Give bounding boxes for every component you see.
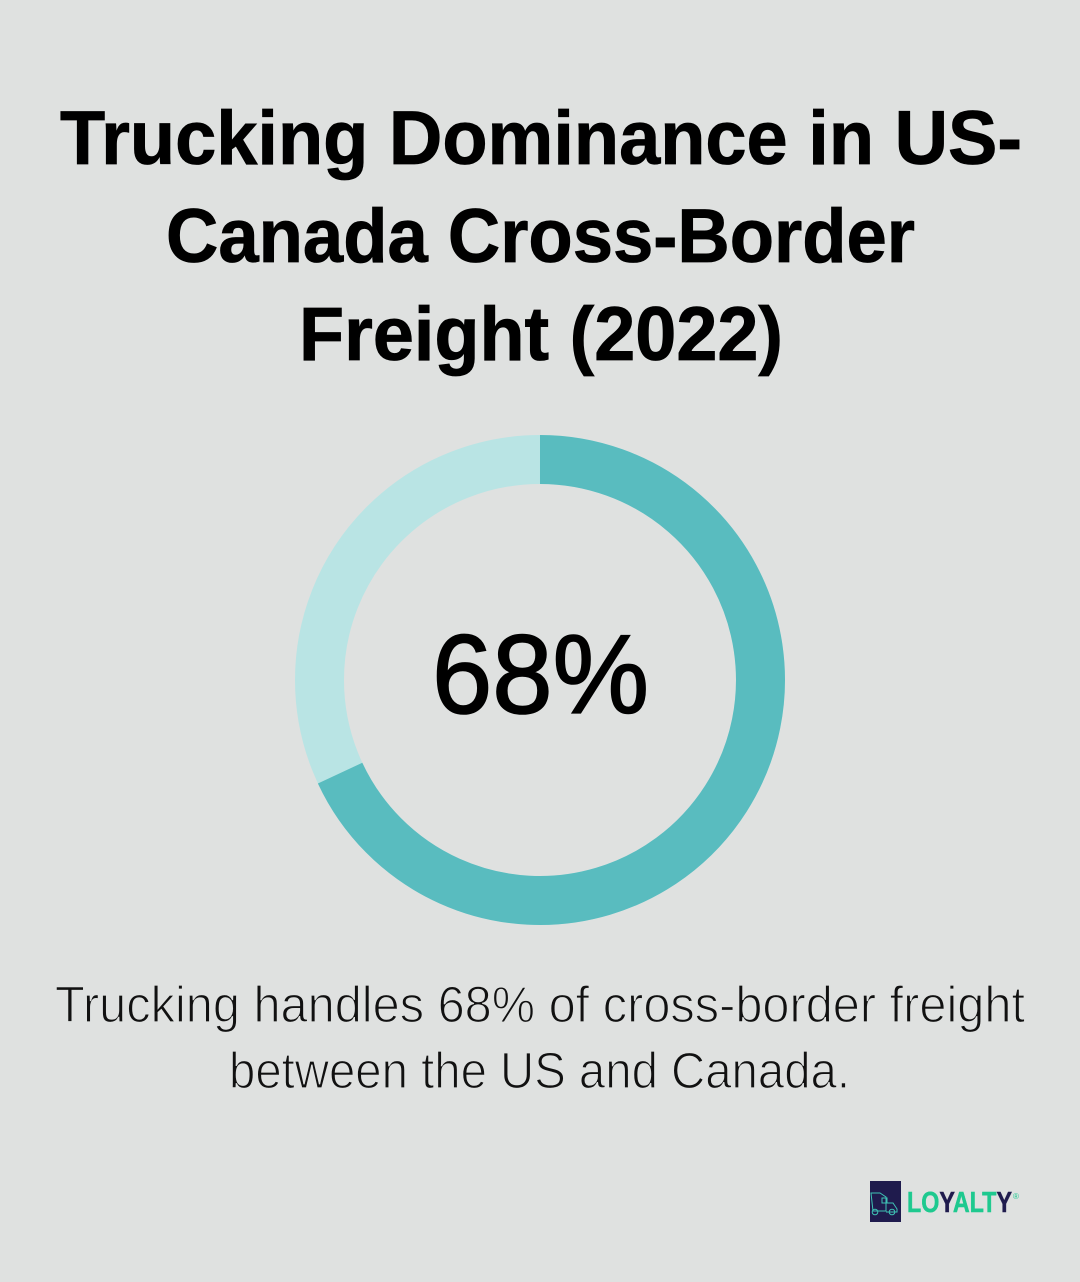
donut track: remaining share — [320, 460, 760, 900]
icon: truck badge — [870, 1181, 901, 1222]
wordmark: LOYALTY — [907, 1187, 1012, 1219]
center value: 68%: 68% — [432, 612, 649, 737]
description text: between the US and Canada. — [229, 1042, 850, 1099]
description text — [55, 976, 1025, 1099]
title — [60, 96, 1022, 377]
logo: Loyalty — [870, 1181, 1019, 1222]
donut chart: 68% — [320, 460, 760, 900]
registered mark: ® — [1013, 1192, 1019, 1201]
donut segment: 68% trucking share — [340, 460, 760, 900]
description text: Trucking handles 68% of cross-border freight — [55, 976, 1025, 1033]
title: Canada Cross-Border — [166, 194, 915, 279]
title: Freight (2022) — [299, 292, 783, 377]
title: Trucking Dominance in US- — [60, 96, 1022, 181]
